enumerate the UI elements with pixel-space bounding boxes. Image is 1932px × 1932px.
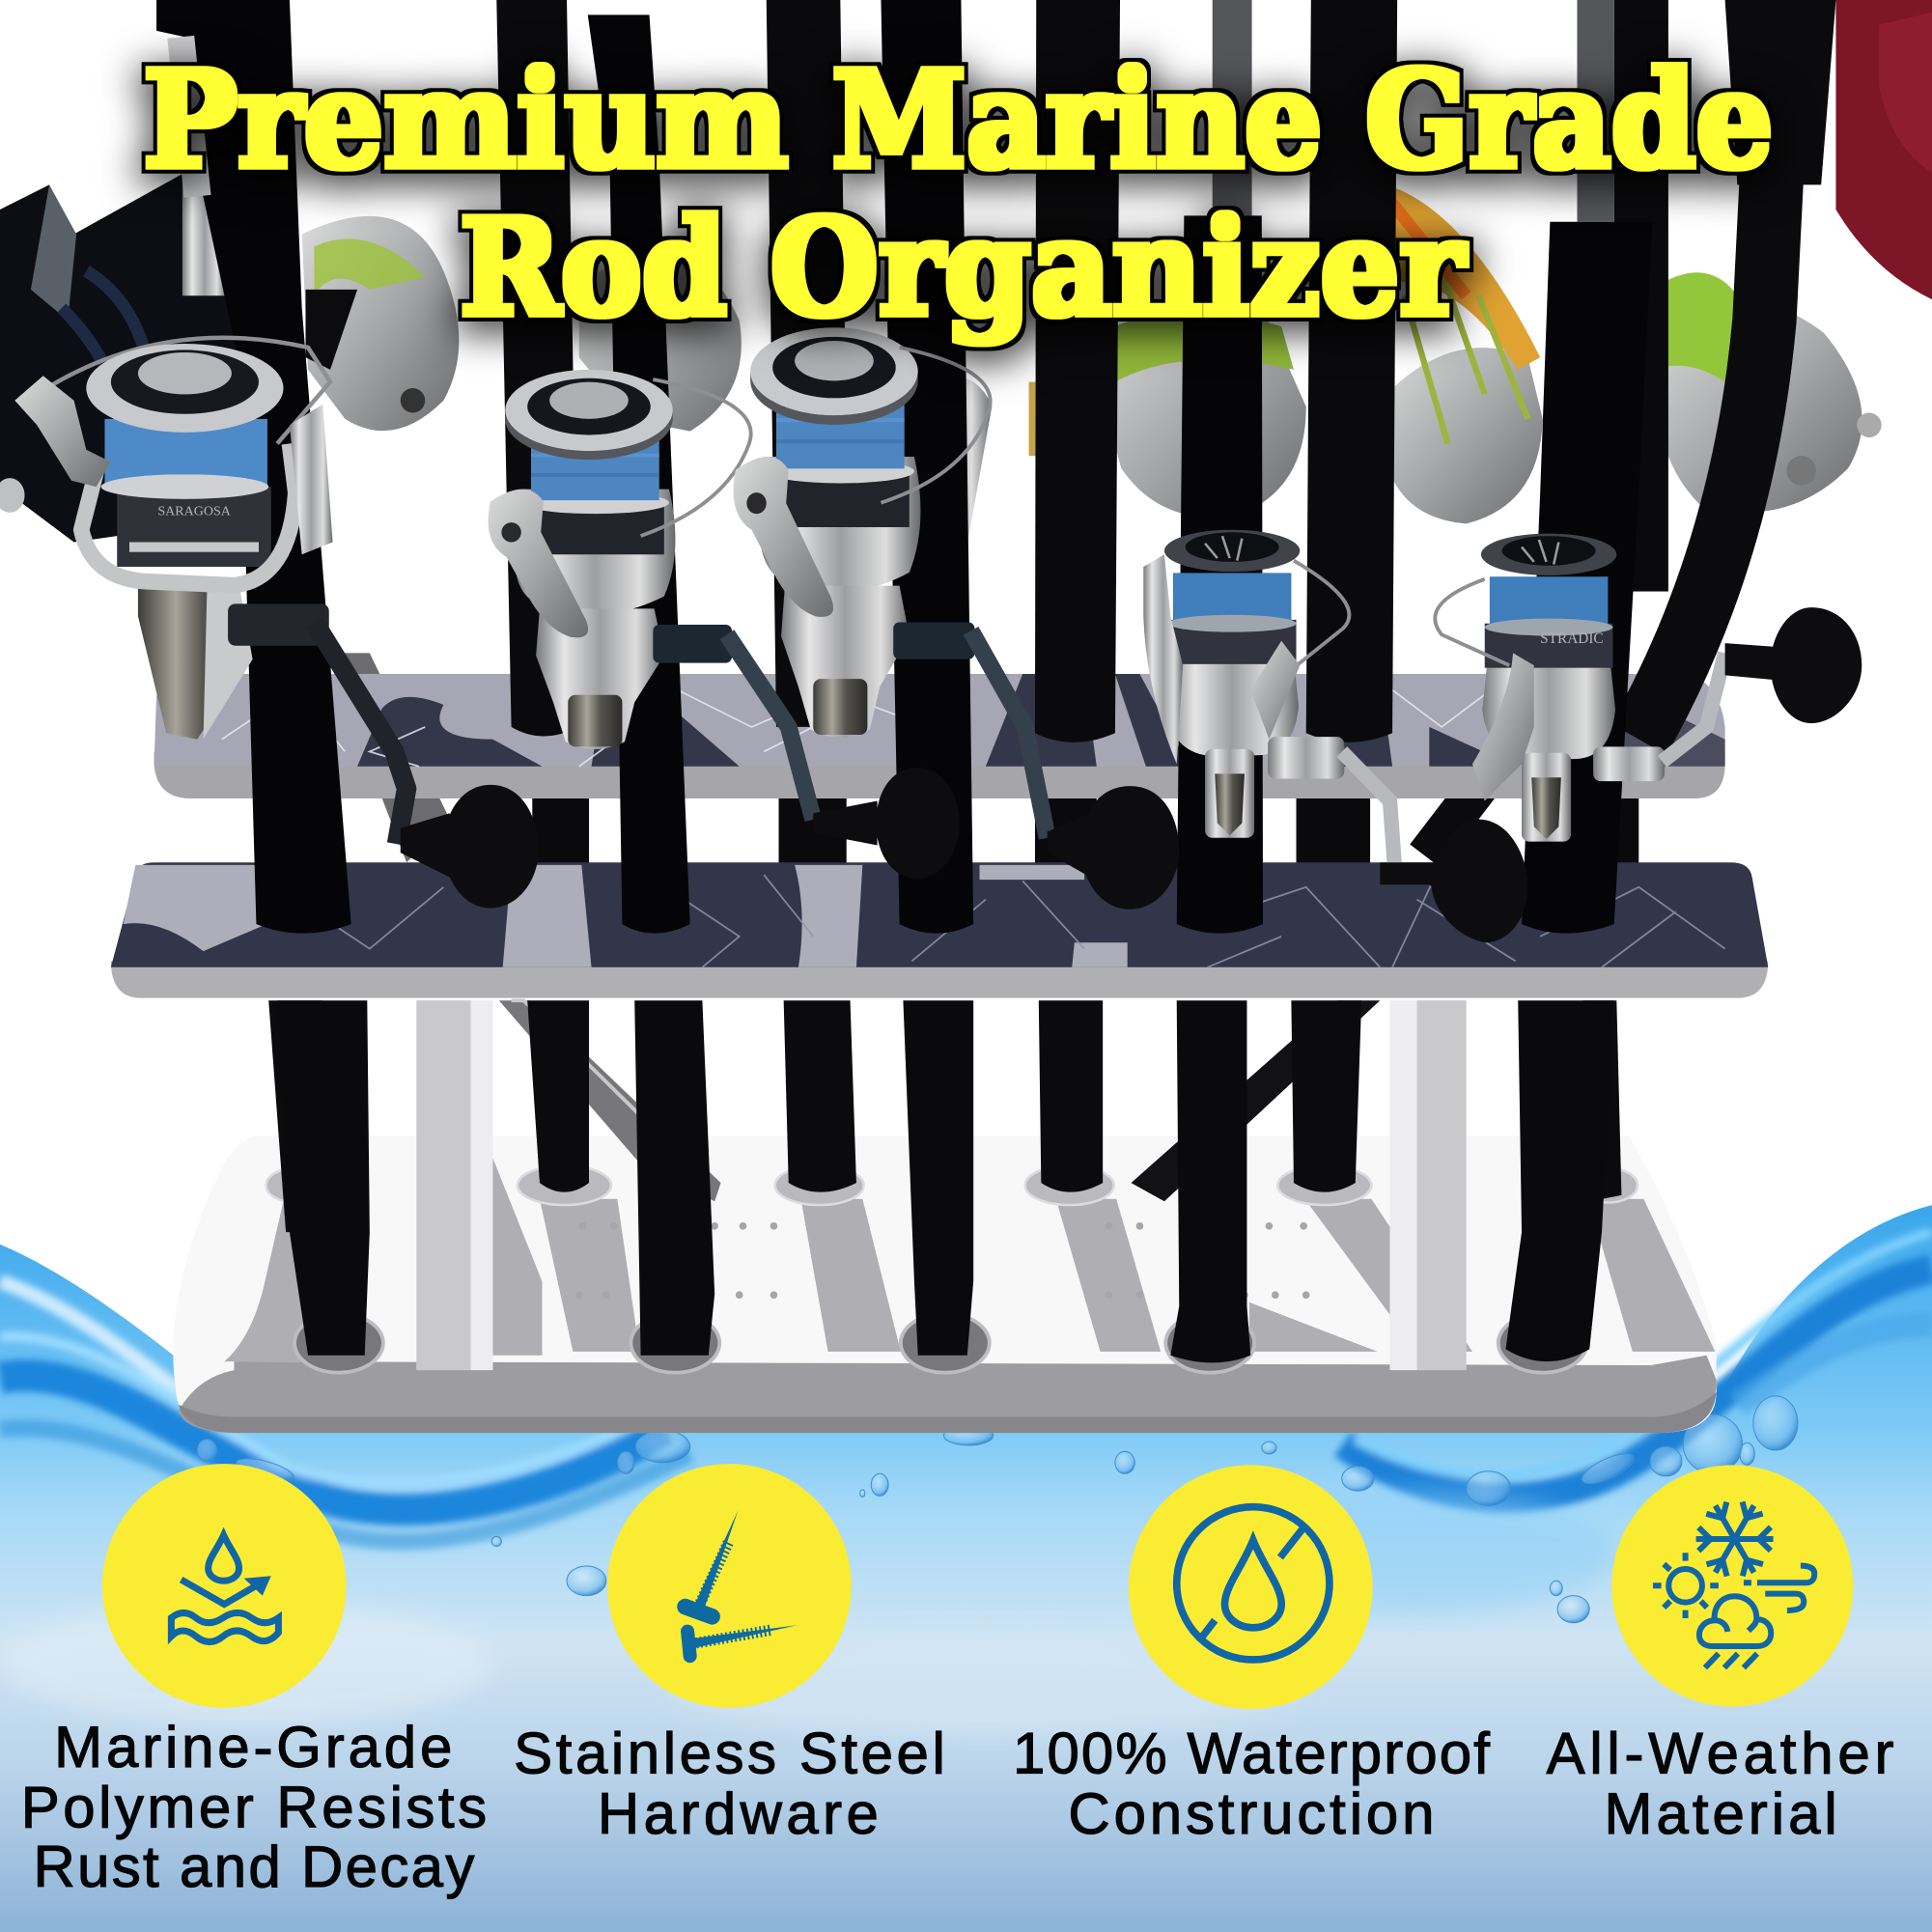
caption [514,1721,945,1846]
knob [401,785,539,909]
title [143,42,1773,346]
front rods above lower shelf [156,0,1652,934]
front rod butts [277,1000,1614,1362]
caption: Marine-Grade [54,1715,452,1779]
water background [0,1205,1932,1932]
water droplets [197,1396,1798,1623]
feature: 100% waterproof construction [1013,1465,1490,1846]
knob [1725,607,1862,723]
caption: Stainless Steel [514,1721,945,1785]
reel: silver Talica [302,216,459,431]
back rod butts [268,1000,1621,1232]
caption: Construction [1068,1781,1434,1846]
reel: silver with green line, centre [1029,295,1306,518]
curved rod, right [1638,0,1835,740]
title: Grade [1365,42,1773,198]
spinning reel 4 [1143,530,1527,942]
upper shelf pattern [222,684,1491,767]
lower shelf [111,862,1768,998]
left wave band [0,1281,690,1541]
stradic label: STRADIC [1540,630,1604,647]
feature: marine-grade polymer [21,1464,487,1899]
rack base plate [173,1136,1717,1433]
lower shelf pattern [295,862,1725,967]
caption: Hardware [598,1781,879,1846]
reel: silver behind third rod [900,374,992,579]
reel: silver with lure [1383,184,1543,523]
upper shelf [154,674,1725,798]
water cloud haze [0,1602,492,1725]
base front edge [179,1356,1717,1433]
icon: yellow circle with weather symbols [1611,1465,1853,1706]
caption [1013,1721,1490,1846]
saragosa label: SARAGOSA [157,503,232,518]
reel: silver with green line, right [1651,272,1882,513]
upper shelf shadows [357,674,1725,767]
spinning reel 2 [489,370,960,879]
caption: Polymer Resists [21,1776,487,1840]
spinning reel 3 [734,327,1179,910]
red reel, top right [1835,0,1932,299]
base rod holes [294,1313,1587,1373]
title: Organizer [770,189,1468,346]
title: Rod [460,189,727,346]
spinning reel 5 [1435,534,1862,842]
rod butt silver strip [167,36,211,198]
knob [813,768,960,879]
rod wraps, grey [1213,0,1614,222]
black saltwater reel, left [0,160,246,543]
caption: Rust and Decay [33,1834,474,1899]
knob [1048,786,1179,910]
diagonal rods behind rack [499,1000,1380,1201]
diagonal black rod between shelves, right [1426,772,1490,856]
icon: yellow circle with screws [607,1464,852,1708]
diagonal grey rod behind first reel [326,653,450,862]
rod sections between shelves [532,798,1638,873]
icon: yellow circle with crossed-out drop [1129,1465,1373,1709]
caption: 100% Waterproof [1013,1721,1490,1785]
lower shelf light patches [124,865,1128,967]
icon: yellow circle with drop, arrow and waves [102,1464,347,1708]
knob [1380,820,1527,942]
caption: All-Weather [1547,1721,1893,1785]
caption [1547,1721,1893,1846]
feature: stainless steel hardware [514,1464,945,1846]
base mounting dots [575,1222,1310,1299]
caption [21,1715,487,1899]
feature: all-weather material [1547,1465,1893,1846]
base shadow fingers [224,1159,1715,1361]
title: Premium [143,42,789,198]
title: Marine [831,42,1322,198]
right wave band [1343,1232,1932,1498]
caption: Material [1605,1781,1837,1846]
spinning reel: Saragosa [14,338,539,909]
back rods above upper shelf [496,0,1668,742]
rack support posts [416,1000,1467,1370]
reel: silver behind second rod [579,254,742,432]
